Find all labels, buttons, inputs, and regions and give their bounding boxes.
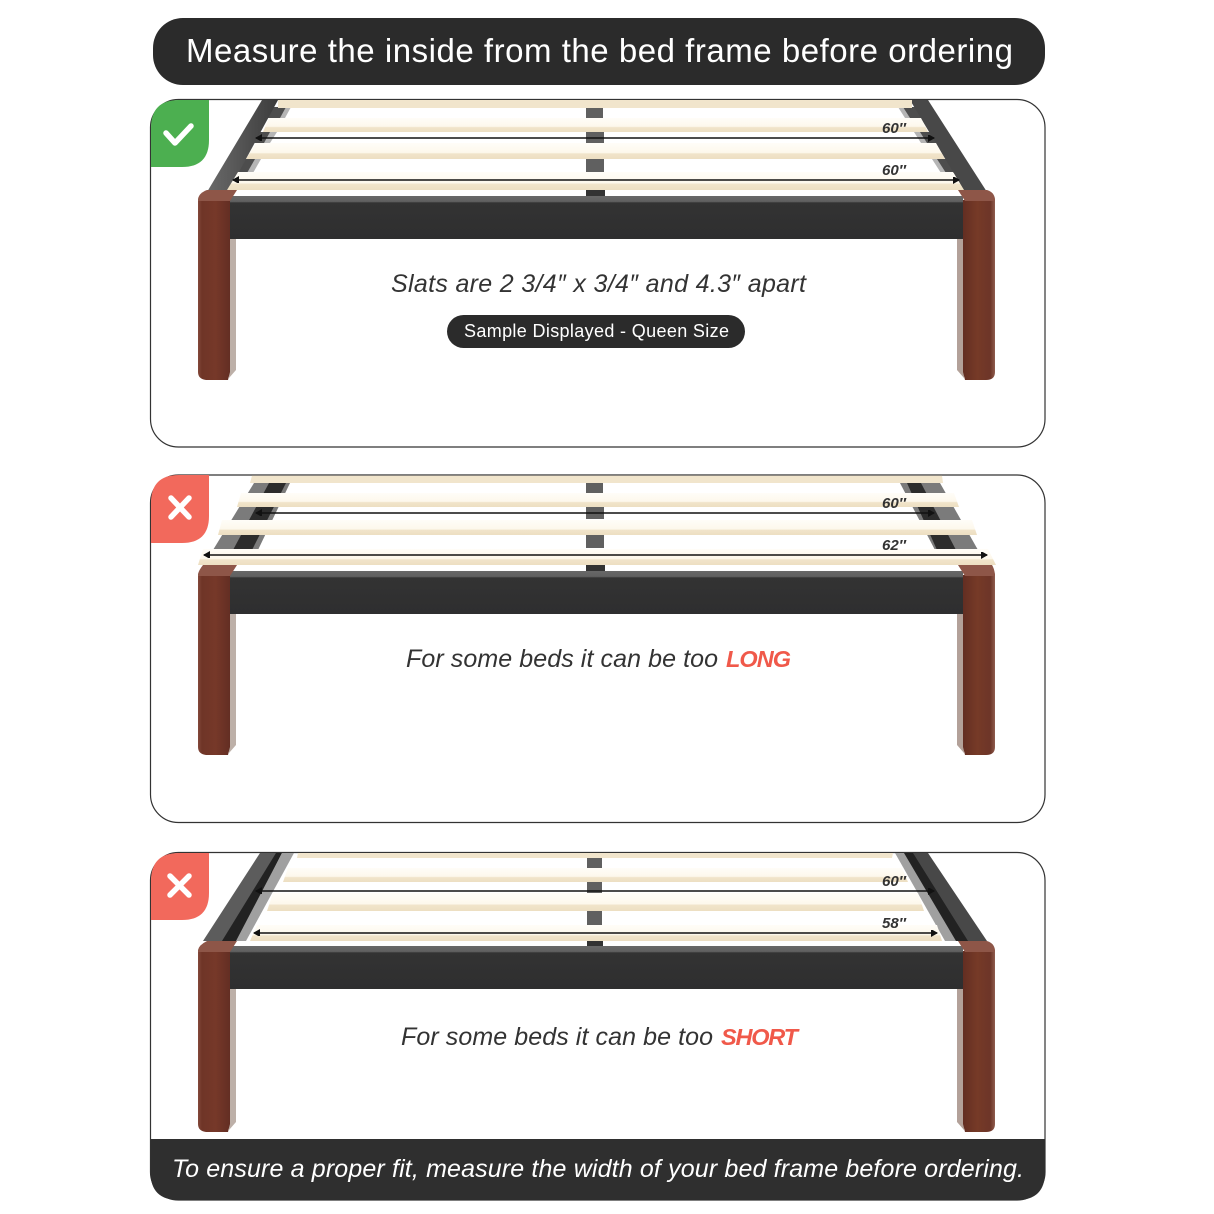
dimension label: 60″ <box>882 120 907 137</box>
left leg <box>198 941 237 1132</box>
highlight word: SHORT <box>721 1024 800 1050</box>
right leg <box>957 565 995 755</box>
footer banner <box>150 1139 1045 1200</box>
front rail <box>230 571 963 614</box>
icon: green check badge <box>151 100 209 167</box>
center support <box>586 482 605 571</box>
dimension label: 60″ <box>882 873 907 890</box>
right leg <box>957 941 995 1132</box>
highlight word: LONG <box>726 646 791 672</box>
measurement arrows <box>254 891 937 933</box>
dimension label: 60″ <box>882 495 907 512</box>
icon: red cross badge <box>151 475 209 543</box>
bed frame: side rails <box>213 483 978 550</box>
title banner <box>153 18 1045 85</box>
center support <box>586 107 605 196</box>
wood slats <box>198 476 996 565</box>
wood slats <box>250 853 942 941</box>
panel: too short <box>150 852 1045 1200</box>
size pill <box>447 315 745 348</box>
measurement arrows <box>233 138 959 180</box>
bed frame: side rails <box>207 100 987 192</box>
front rail <box>230 196 963 239</box>
dimension label: 58″ <box>882 915 907 932</box>
footer banner: To ensure a proper fit, measure the width of your bed frame before ordering. <box>172 1155 1024 1183</box>
caption: For some beds it can be too <box>406 645 718 673</box>
caption: For some beds it can be too <box>401 1023 713 1051</box>
panel: too long <box>150 475 1045 822</box>
bed frame: side rails <box>203 853 987 941</box>
left leg <box>198 190 237 380</box>
dimension label: 60″ <box>882 162 907 179</box>
dimension label: 62″ <box>882 537 907 554</box>
left leg <box>198 565 237 755</box>
title banner: Measure the inside from the bed frame before ordering <box>186 32 1013 69</box>
icon: red cross badge <box>151 853 209 920</box>
measurement arrows <box>204 513 987 555</box>
caption: Slats are 2 3/4″ x 3/4″ and 4.3″ apart <box>391 270 807 298</box>
center support <box>587 858 603 947</box>
right leg <box>957 190 995 380</box>
size pill: Sample Displayed - Queen Size <box>464 321 729 341</box>
wood slats <box>227 100 964 190</box>
front rail <box>230 946 963 989</box>
panel: correct fit <box>150 100 1045 447</box>
